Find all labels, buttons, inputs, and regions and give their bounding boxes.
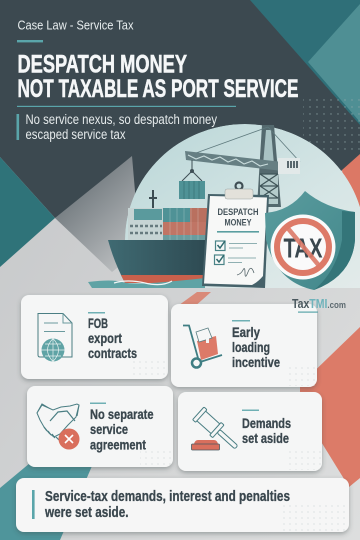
card: FOB export contracts: contracts: [88, 346, 137, 361]
icon: handshake with cross: [37, 404, 80, 450]
crane: [179, 125, 300, 207]
card: Early loading incentive: [171, 304, 317, 387]
clipboard: DESPATCH: [218, 207, 259, 218]
icon: gavel: [192, 407, 242, 454]
card: FOB export contracts: [21, 295, 168, 379]
clipboard: [202, 182, 269, 288]
shield with no-tax sign: TAX: [284, 232, 323, 264]
panel: conclusion: Service-tax demands, interest and penalties: [45, 489, 290, 505]
card: Early loading incentive: Early: [232, 325, 260, 340]
illustration: port scene: [88, 124, 360, 290]
card: Demands set aside: [178, 392, 322, 471]
card: No separate service agreement: No separate: [90, 407, 154, 422]
card: FOB export contracts: export: [88, 331, 122, 346]
card: No separate service agreement: service: [90, 422, 128, 437]
subtitle: escaped service tax: [26, 127, 126, 142]
accent rule: [17, 40, 43, 42]
icon: document with globe: [38, 314, 72, 362]
panel: conclusion: [16, 478, 349, 532]
panel: conclusion: were set aside.: [44, 505, 128, 521]
card: Demands set aside: Demands: [242, 416, 291, 431]
subtitle: [16, 112, 217, 142]
logo: TaxTMI.com: TaxTMI.com: [292, 297, 346, 311]
card: Demands set aside: set aside: [242, 431, 289, 446]
card: No separate service agreement: agreement: [90, 438, 146, 452]
title underline: [17, 106, 236, 107]
subtitle: No service nexus, so despatch money: [26, 112, 217, 127]
ship: [88, 190, 207, 288]
icon: hand truck: [183, 326, 222, 368]
scene backdrop: [125, 124, 360, 288]
title: [18, 50, 298, 103]
title: DESPATCH MONEY: [18, 50, 187, 78]
shield with no-tax sign: [265, 191, 355, 290]
card: No separate service agreement: [27, 386, 173, 467]
clipboard: MONEY: [224, 218, 252, 228]
card: Early loading incentive: loading: [232, 340, 270, 355]
label: case law: Case Law - Service Tax: [18, 18, 134, 32]
card: FOB export contracts: FOB: [88, 316, 108, 331]
card: Early loading incentive: incentive: [232, 355, 280, 370]
